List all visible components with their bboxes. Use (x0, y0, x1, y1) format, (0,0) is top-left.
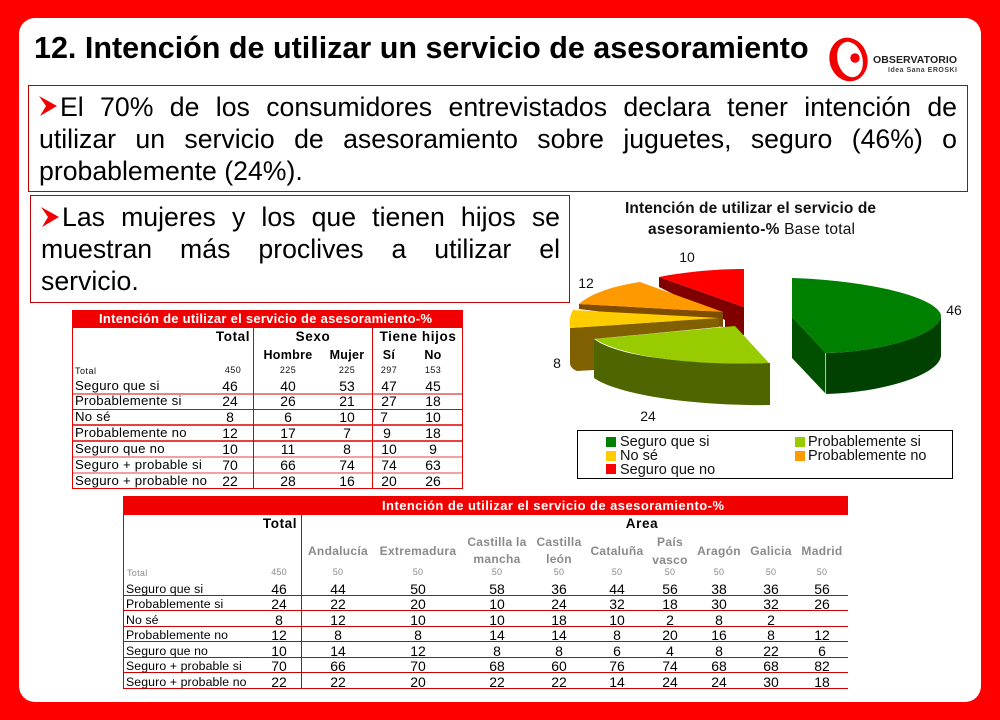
area table rows: 70 (410, 658, 426, 674)
table column headings: 297 (381, 365, 397, 375)
area table rows: 22 (489, 674, 505, 690)
table column headings: Mujer (330, 348, 364, 362)
area table rows: Seguro que no (126, 644, 208, 658)
pie slice: Seguro que no 10 (659, 269, 744, 335)
table rows: 6 (284, 409, 292, 425)
pie slice: Seguro que si 46 (792, 278, 941, 394)
table rows: 53 (339, 378, 355, 394)
area table rows: 36 (763, 581, 779, 597)
area table rows: 58 (489, 581, 505, 597)
area table rows: 14 (489, 627, 505, 643)
area column headings: Andalucía (308, 544, 368, 558)
text block: women and parents (30, 195, 570, 303)
area table rows: 12 (271, 627, 287, 643)
area table rows: Seguro que si (126, 582, 203, 596)
area table rows: 2 (767, 612, 775, 628)
table rows: 40 (280, 378, 296, 394)
area table rows: Seguro + probable si (126, 659, 242, 673)
area column headings: vasco (652, 553, 688, 567)
table: intention by area (123, 496, 848, 690)
area table rows: 56 (662, 581, 678, 597)
text block: women and parents: servicio. (41, 266, 139, 296)
table rows: 7 (343, 425, 351, 441)
area table rows: 38 (711, 581, 727, 597)
area table rows: 14 (330, 643, 346, 659)
area table rows: 60 (551, 658, 567, 674)
area table rows: 12 (330, 612, 346, 628)
table rows: 28 (280, 473, 296, 489)
table column headings: Total (75, 366, 97, 376)
area column headings: Extremadura (380, 544, 456, 558)
table rows: 22 (222, 473, 238, 489)
table: intention by sex and children (72, 310, 463, 489)
area column headings: 50 (492, 567, 502, 577)
area table rows: 50 (410, 581, 426, 597)
area table rows: 68 (711, 658, 727, 674)
table rows: 26 (425, 473, 441, 489)
table rows: 46 (222, 378, 238, 394)
table column headings: Total (216, 329, 250, 344)
area table rows: 32 (763, 596, 779, 612)
area table rows: 32 (609, 596, 625, 612)
area table rows: 44 (609, 581, 625, 597)
pie data labels: 10 (679, 249, 695, 265)
area table rows: 30 (763, 674, 779, 690)
area table rows: 36 (551, 581, 567, 597)
area table rows: 6 (613, 643, 621, 659)
title: 12. Intención de utilizar un servicio de asesoramiento (34, 31, 809, 65)
chart title: Intención de utilizar el servicio de (625, 200, 876, 217)
area column headings: País (657, 535, 683, 549)
area column headings: 450 (271, 567, 287, 577)
text block: women and parents: muestran más proclives a utilizar el (41, 234, 560, 264)
table rows: 17 (280, 425, 296, 441)
area table rows: 10 (489, 612, 505, 628)
table column headings: Sexo (296, 329, 330, 344)
area table rows: 76 (609, 658, 625, 674)
area table rows: 44 (330, 581, 346, 597)
table rows: 18 (425, 425, 441, 441)
pie slice: Probablemente si 24 (594, 326, 770, 405)
logo: Observatorio: Idea Sana EROSKI (888, 67, 957, 74)
area table header bar (123, 496, 848, 515)
chart legend: Probablemente no (808, 448, 926, 464)
table rows: 21 (339, 393, 355, 409)
area table rows: 10 (271, 643, 287, 659)
table column headings: 450 (225, 365, 241, 375)
area table rows: 8 (715, 643, 723, 659)
area table rows: 14 (551, 627, 567, 643)
table rows: 9 (383, 425, 391, 441)
table column headings: 225 (280, 365, 296, 375)
area table rows: 82 (814, 658, 830, 674)
area table rows: 10 (489, 596, 505, 612)
pie data labels (553, 249, 962, 424)
table rows: 63 (425, 457, 441, 473)
area table rows: No sé (126, 613, 159, 627)
pie data labels: 46 (946, 302, 962, 318)
area table rows: 20 (410, 596, 426, 612)
table rows: 11 (281, 441, 295, 457)
chart title: asesoramiento-% Base total (648, 221, 855, 238)
area column headings: león (546, 552, 572, 566)
logo: Observatorio (824, 33, 957, 86)
table rows: No sé (75, 409, 111, 424)
table rows (75, 378, 441, 489)
text block: women and parents: Las mujeres y los que tienen hijos se (62, 202, 560, 232)
area table rows: 8 (555, 643, 563, 659)
area table rows: 8 (414, 627, 422, 643)
table rows: 20 (381, 473, 397, 489)
area column headings: Madrid (801, 544, 843, 558)
area table rows: Probablemente si (126, 597, 223, 611)
pie slice: Probablemente no 12 (579, 282, 723, 327)
table header bar (72, 310, 463, 328)
table rows: 66 (280, 457, 296, 473)
area table rows: 46 (271, 581, 287, 597)
pie data labels: 24 (640, 408, 656, 424)
area table rows: 74 (662, 658, 678, 674)
table rows: 45 (425, 378, 441, 394)
area column headings: Galicia (750, 544, 792, 558)
area column headings: Castilla (536, 535, 582, 549)
chart legend: Seguro que si (620, 434, 709, 450)
pie data labels: 8 (553, 355, 561, 371)
table rows: 9 (429, 441, 437, 457)
area table rows (126, 581, 830, 690)
area table rows: 24 (662, 674, 678, 690)
area column headings: 50 (714, 567, 724, 577)
chart legend: Probablemente si (808, 434, 921, 450)
chart: 3D exploded pie (553, 249, 962, 424)
table column headings (75, 329, 456, 376)
area column headings: 50 (766, 567, 776, 577)
table rows: Probablemente si (75, 393, 182, 408)
table rows: 18 (425, 393, 441, 409)
pie slice: No sé 8 (570, 310, 719, 371)
area table rows: 12 (410, 643, 426, 659)
area table rows: 8 (275, 612, 283, 628)
table rows: 12 (222, 425, 238, 441)
area table rows: 4 (666, 643, 674, 659)
table rows: 8 (343, 441, 351, 457)
area table rows: 56 (814, 581, 830, 597)
table rows: 10 (425, 409, 441, 425)
area column headings (127, 516, 843, 578)
area column headings: mancha (473, 552, 521, 566)
area table rows: 66 (330, 658, 346, 674)
table rows: Probablemente no (75, 425, 187, 440)
table rows: 74 (339, 457, 355, 473)
area table rows: 68 (489, 658, 505, 674)
area column headings: 50 (817, 567, 827, 577)
table column headings: Tiene hijos (380, 329, 456, 344)
area table rows: 70 (271, 658, 287, 674)
table rows: Seguro que si (75, 378, 160, 393)
table rows: 7 (380, 409, 388, 425)
area table rows: 8 (715, 612, 723, 628)
area table rows: 8 (613, 627, 621, 643)
area table rows: 6 (818, 643, 826, 659)
logo: Observatorio: OBSERVATORIO (873, 54, 957, 66)
chart legend: Seguro que no (620, 462, 715, 478)
area table rows: 68 (763, 658, 779, 674)
chart title (625, 200, 876, 238)
area table rows: 24 (711, 674, 727, 690)
pie data labels: 12 (578, 275, 594, 291)
table rows: 74 (381, 457, 397, 473)
table rows: Seguro + probable no (75, 473, 207, 488)
area table rows: 22 (330, 596, 346, 612)
area table rows: 18 (662, 596, 678, 612)
area table rows: 8 (334, 627, 342, 643)
area table rows: 24 (551, 596, 567, 612)
area column headings: Area (626, 516, 658, 531)
area table rows: 22 (330, 674, 346, 690)
area column headings: Cataluña (590, 544, 644, 558)
table column headings: No (424, 348, 442, 362)
area table rows: Seguro + probable no (126, 675, 247, 689)
area table rows: 18 (814, 674, 830, 690)
area column headings: Total (127, 568, 148, 578)
area table rows: 20 (410, 674, 426, 690)
area table rows: 26 (814, 596, 830, 612)
area column headings: 50 (333, 567, 343, 577)
area table rows: 8 (767, 627, 775, 643)
area table rows: 22 (551, 674, 567, 690)
area table rows: 18 (551, 612, 567, 628)
text block: 70% intention (28, 85, 968, 192)
area table rows: 14 (609, 674, 625, 690)
area table rows: 20 (662, 627, 678, 643)
area table heading: Intención de utilizar el servicio de asesoramiento-% (382, 498, 724, 513)
table rows: 16 (339, 473, 355, 489)
area table rows: 10 (410, 612, 426, 628)
table column headings: 153 (425, 365, 441, 375)
area table rows: 8 (493, 643, 501, 659)
area table rows: 22 (763, 643, 779, 659)
area column headings: 50 (665, 567, 675, 577)
table rows: 24 (222, 393, 238, 409)
area table rows: 30 (711, 596, 727, 612)
text block: 70% intention: utilizar un servicio de asesoramiento sobre juguetes, seguro (46%) o (39, 124, 957, 154)
area column headings: 50 (612, 567, 622, 577)
table rows: 26 (280, 393, 296, 409)
table rows: 27 (381, 393, 397, 409)
table rows: 47 (381, 378, 397, 394)
area column headings: Castilla la (467, 535, 527, 549)
table rows: Seguro que no (75, 441, 165, 456)
area column headings: 50 (554, 567, 564, 577)
table rows: 10 (339, 409, 355, 425)
chart legend (578, 430, 952, 478)
area table rows: 22 (271, 674, 287, 690)
area table rows: 10 (609, 612, 625, 628)
table rows: Seguro + probable si (75, 457, 202, 472)
table rows: 10 (381, 441, 397, 457)
text block: 70% intention: El 70% de los consumidores entrevistados declara tener intención de (60, 92, 957, 122)
table rows: 8 (226, 409, 234, 425)
chart legend: No sé (620, 448, 658, 464)
area table rows: Probablemente no (126, 628, 228, 642)
table heading: Intención de utilizar el servicio de asesoramiento-% (99, 311, 432, 326)
area column headings: 50 (413, 567, 423, 577)
area column headings: Aragón (697, 544, 741, 558)
text block: 70% intention: probablemente (24%). (39, 156, 303, 186)
table rows: 70 (222, 457, 238, 473)
table column headings: 225 (339, 365, 355, 375)
table column headings: Sí (383, 348, 395, 362)
area table rows: 12 (814, 627, 830, 643)
area column headings: Total (263, 516, 297, 531)
area table rows: 2 (666, 612, 674, 628)
table column headings: Hombre (263, 348, 313, 362)
table rows: 10 (222, 441, 238, 457)
area table rows: 16 (711, 627, 727, 643)
area table rows: 24 (271, 596, 287, 612)
